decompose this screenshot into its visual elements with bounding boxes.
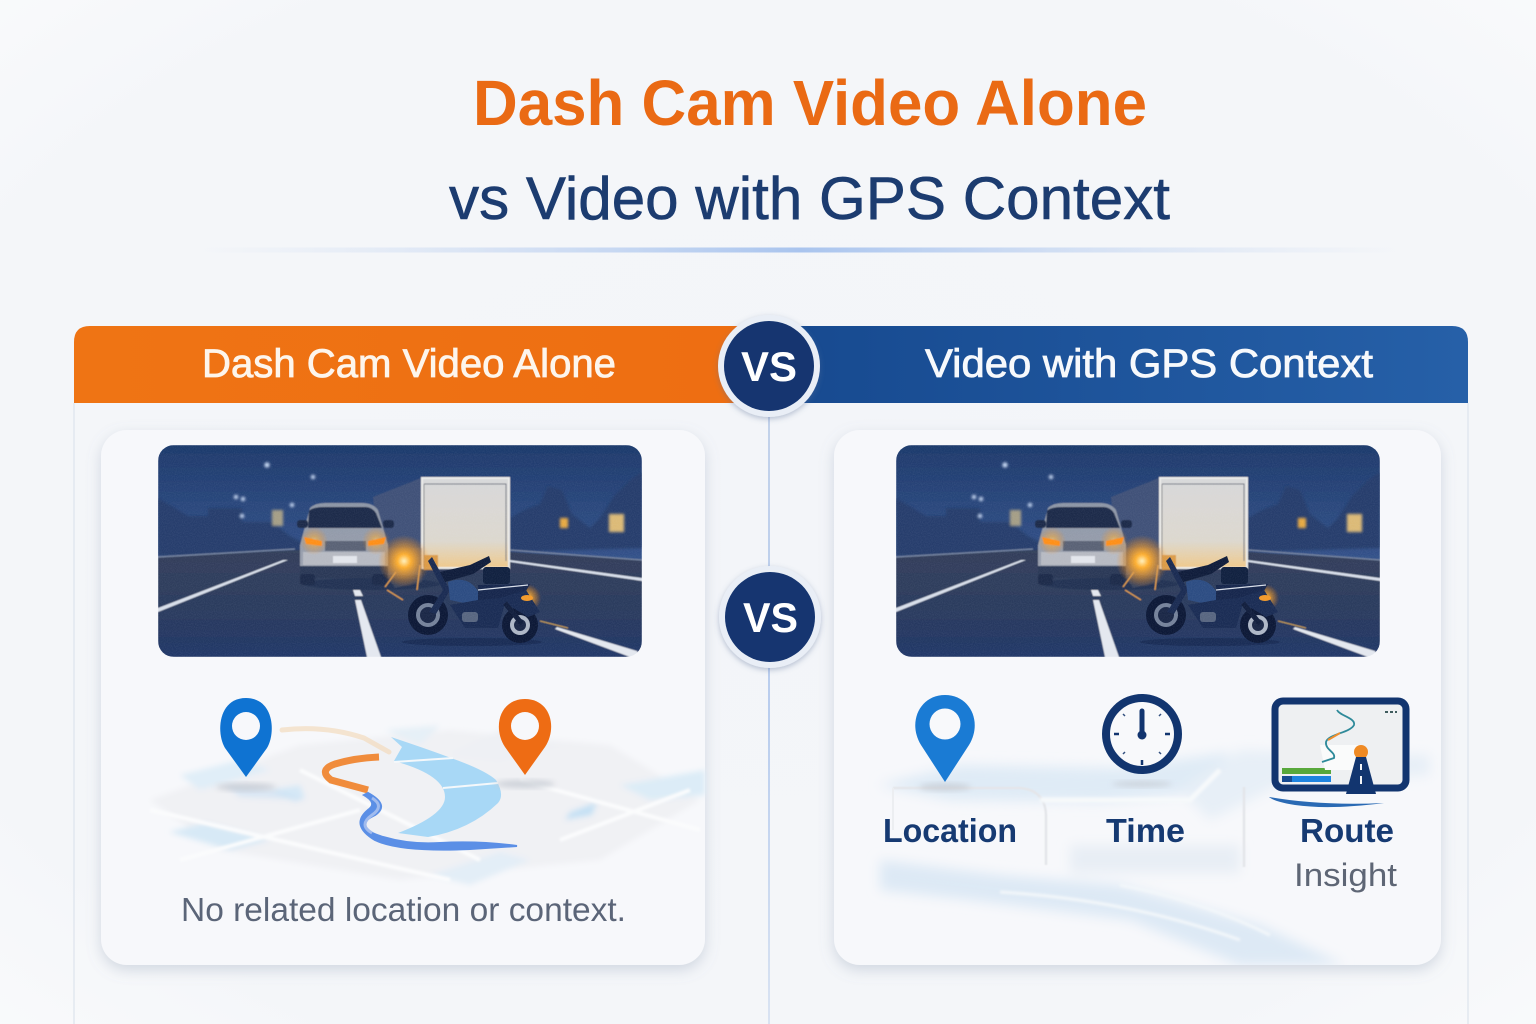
icon: blue map pin [216, 698, 276, 791]
VS badge middle: VS [743, 594, 798, 641]
card background [834, 430, 1441, 965]
label: route insight [1294, 812, 1397, 893]
label: time: Time [1106, 812, 1185, 849]
title line 2: vs Video with GPS Context [449, 165, 1170, 232]
caption: No related location or context. [181, 891, 626, 928]
header: dash cam video alone [74, 326, 745, 403]
faded city map [150, 725, 705, 885]
icon: navigation tablet [1269, 701, 1406, 807]
panel: video with GPS context [834, 430, 1441, 965]
label: location: Location [883, 812, 1017, 849]
label: route insight: Route [1300, 812, 1394, 849]
icon: orange map pin [495, 699, 555, 788]
faded road map background [878, 750, 1430, 965]
header: video with GPS context [795, 326, 1468, 403]
title [449, 67, 1170, 232]
panel: dash cam video alone [101, 430, 705, 965]
label: route insight: Insight [1294, 857, 1397, 893]
icon: clock [1106, 698, 1178, 787]
VS badge top: VS [741, 343, 797, 390]
header: video with GPS context: Video with GPS Context [925, 342, 1373, 386]
comparison panel frame [74, 403, 1468, 1024]
header: dash cam video alone: Dash Cam Video Alone [202, 342, 616, 386]
card background [101, 430, 705, 965]
title line 1: Dash Cam Video Alone [473, 67, 1147, 139]
video still: night crash scene [158, 445, 642, 657]
icon: location pin [915, 695, 975, 791]
VS badge top [718, 315, 820, 417]
video still: night crash scene [896, 445, 1380, 657]
VS badge middle [719, 566, 821, 668]
